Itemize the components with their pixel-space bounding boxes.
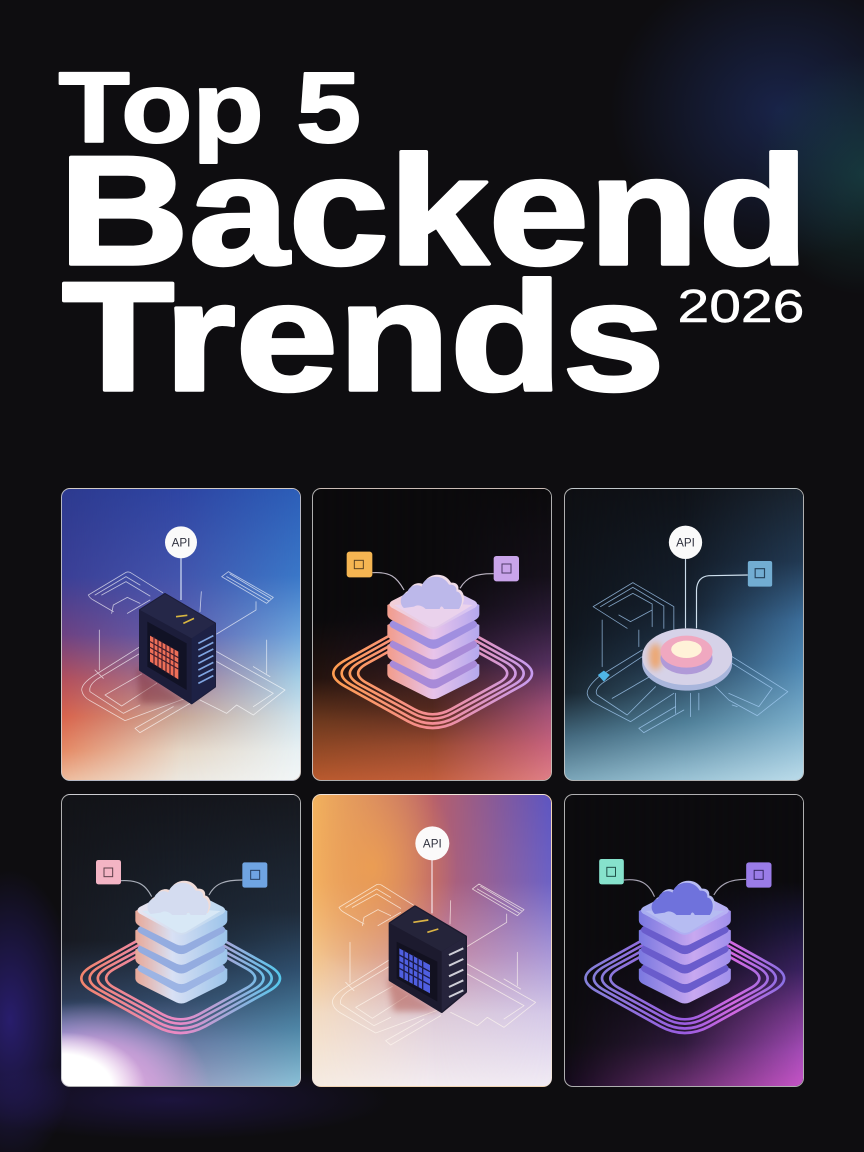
- panel: trend 5 server: [312, 794, 552, 1087]
- server shadow: [136, 666, 190, 703]
- panel: trend 3 gateway disc: [564, 488, 804, 781]
- layered stack: [135, 887, 227, 1003]
- wireframe schematic: [587, 582, 787, 732]
- API connector: [179, 558, 182, 600]
- API badge: API: [676, 536, 694, 549]
- cloud icon: [147, 880, 210, 914]
- panel: trend 6 cloud stack: [564, 794, 804, 1087]
- cube accent: [597, 670, 609, 681]
- API badge: API: [171, 536, 190, 549]
- layered stack: [387, 581, 479, 699]
- cloud icon: [651, 880, 714, 914]
- wireframe schematic: [332, 884, 535, 1044]
- cable to node: [696, 574, 747, 628]
- API badge: [415, 826, 449, 860]
- concentric rings: [585, 923, 784, 1032]
- node: blue: [242, 862, 267, 887]
- API badge: [164, 526, 196, 558]
- node: orange: [346, 551, 372, 577]
- server box: [390, 906, 465, 1011]
- API connector: [430, 860, 433, 913]
- API connector: [683, 558, 687, 628]
- cables: [120, 880, 242, 896]
- cables: [623, 879, 746, 896]
- layered stack: [638, 887, 730, 1003]
- concentric rings: [81, 923, 279, 1032]
- wireframe schematic: [81, 571, 285, 732]
- concentric rings: [333, 618, 532, 728]
- cables: [372, 572, 493, 590]
- node: teal: [599, 858, 623, 884]
- title line: Top 5: Top 5: [58, 53, 361, 164]
- panel: trend 2 cloud stack: [312, 488, 552, 781]
- node: blue: [747, 560, 772, 586]
- title line: Backend: Backend: [59, 124, 808, 297]
- server box: [140, 594, 214, 703]
- node: pink: [96, 860, 120, 884]
- node: violet: [493, 556, 518, 581]
- node: violet: [746, 862, 771, 887]
- API badge: API: [422, 837, 441, 850]
- year label: 2026: [678, 280, 804, 332]
- title line: Trends: Trends: [62, 251, 665, 420]
- cloud icon: [400, 574, 463, 608]
- glowing disc: [642, 628, 732, 690]
- API badge: [668, 525, 702, 558]
- panel: trend 1 server: [61, 488, 301, 781]
- server shadow: [387, 976, 440, 1011]
- title: [58, 53, 808, 420]
- panel: trend 4 cloud stack: [61, 794, 301, 1087]
